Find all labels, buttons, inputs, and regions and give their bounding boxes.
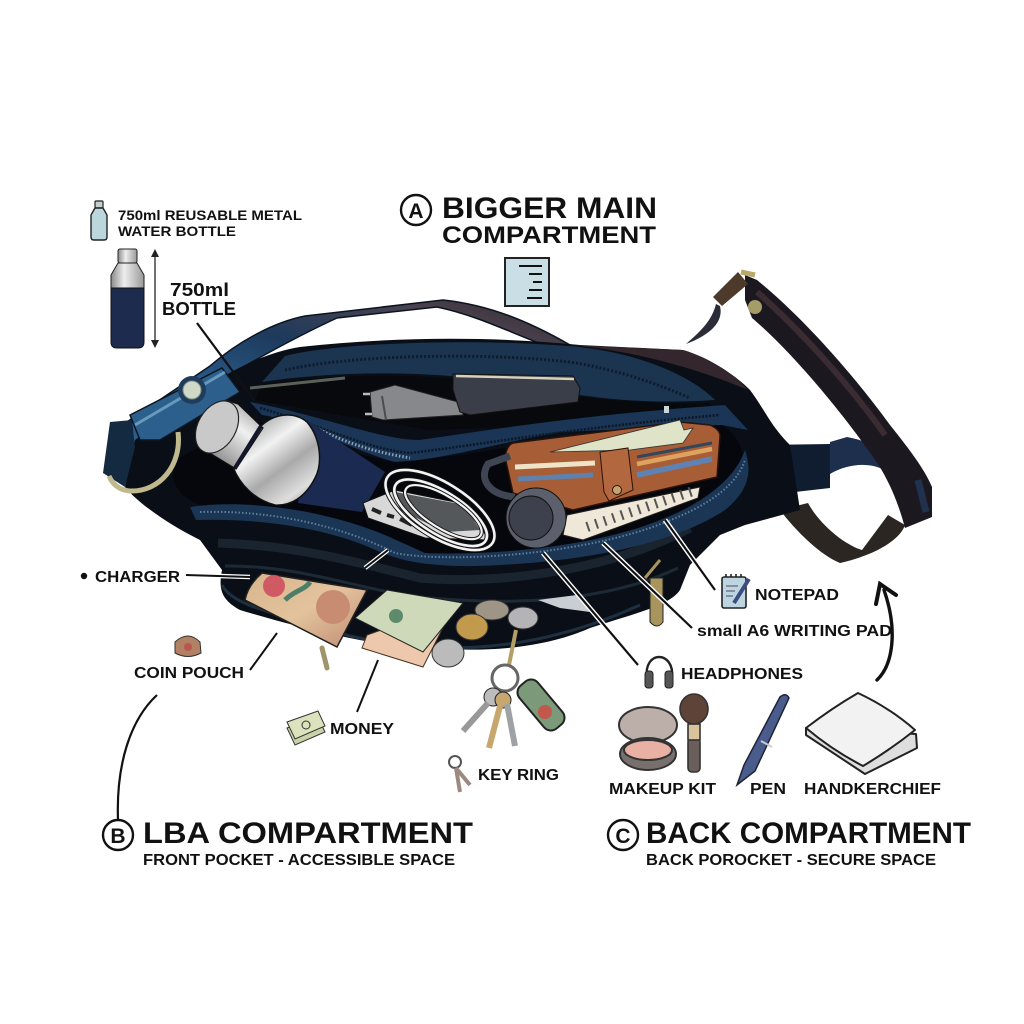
wallet — [505, 420, 720, 510]
phone in back pocket — [453, 374, 580, 415]
icon: notepad — [722, 574, 749, 608]
front edges — [225, 566, 678, 601]
middle zipper band — [250, 402, 748, 462]
heading: A bigger main compartment: BIGGER MAIN — [442, 192, 657, 225]
label: reusable metal water bottle — [118, 207, 302, 239]
label: money: MONEY — [330, 721, 394, 738]
label: reusable metal water bottle: WATER BOTTLE — [118, 223, 236, 239]
label: pen: PEN — [750, 781, 786, 798]
silver phone peek — [538, 595, 590, 612]
bag illustration — [103, 272, 932, 668]
label: small A6 writing pad — [603, 543, 892, 640]
steel bottle in bag — [187, 393, 385, 512]
tab right — [763, 444, 830, 492]
label: 750ml bottle — [162, 280, 236, 319]
shoulder strap right — [686, 272, 932, 563]
heading: A bigger main compartment: COMPARTMENT — [442, 222, 656, 249]
heading: C back compartment: C — [615, 825, 631, 848]
label: coin pouch: COIN POUCH — [134, 665, 244, 682]
heading: A bigger main compartment — [401, 192, 657, 249]
charger pocket marker — [365, 550, 388, 568]
icon: key ring — [449, 756, 470, 792]
icon: pen — [737, 695, 789, 785]
label: makeup kit: MAKEUP KIT — [609, 781, 716, 798]
notebook — [563, 487, 700, 540]
upper blue band — [262, 342, 715, 402]
top handle — [115, 300, 570, 445]
icon: headphones — [645, 657, 673, 688]
icon: makeup brush — [680, 694, 708, 772]
arrow: bottle height — [151, 249, 159, 348]
ring — [109, 432, 178, 491]
label: charger: CHARGER — [95, 569, 180, 586]
heading: C back compartment: BACK POROCKET - SECURE SPACE — [646, 852, 936, 869]
label: headphones — [543, 553, 803, 683]
main body — [125, 339, 800, 650]
heading: B LBA compartment: LBA COMPARTMENT — [143, 817, 473, 850]
label: charger — [81, 569, 250, 586]
back pocket interior — [255, 376, 715, 430]
label: notepad — [665, 520, 839, 604]
strap end with snap — [130, 368, 240, 440]
coin pouch in pocket — [245, 573, 367, 668]
label: handkerchief: HANDKERCHIEF — [804, 781, 941, 798]
heading: B LBA compartment: FRONT POCKET - ACCESSIBLE SPACE — [143, 852, 455, 869]
icon: big bottle — [111, 249, 144, 348]
side zipper pull — [650, 578, 663, 626]
stylus — [250, 378, 345, 388]
money in pocket — [355, 590, 463, 667]
icon: coin pouch — [175, 636, 201, 656]
power bank and cable — [363, 454, 507, 566]
label: money — [330, 660, 394, 738]
label: headphones: HEADPHONES — [681, 666, 803, 683]
coins — [432, 600, 538, 667]
brown leather tint — [570, 345, 748, 390]
icon: measuring document — [505, 258, 549, 306]
arrow: back compartment to main — [876, 584, 896, 680]
label: small A6 writing pad: small A6 WRITING PAD — [697, 623, 892, 640]
headphones in bag — [484, 456, 566, 548]
icon: money — [287, 711, 325, 745]
heading: A bigger main compartment: A — [408, 200, 424, 223]
label: 750ml bottle: 750ml — [170, 280, 229, 300]
icon: handkerchief — [806, 693, 917, 774]
label: coin pouch — [134, 633, 277, 682]
key ring in use — [463, 630, 568, 748]
icon: makeup compact — [619, 707, 677, 770]
main compartment interior — [173, 420, 743, 556]
label: reusable metal water bottle: 750ml REUSABLE METAL — [118, 207, 302, 223]
leader arrow: B to pocket — [118, 695, 157, 820]
heading: C back compartment: BACK COMPARTMENT — [646, 817, 971, 850]
heading: B LBA compartment — [103, 817, 473, 869]
heading: B LBA compartment: B — [110, 825, 126, 848]
left tab — [103, 420, 135, 487]
heading: C back compartment — [608, 817, 971, 869]
icon: water bottle small — [91, 201, 107, 240]
charger in back pocket — [363, 385, 463, 420]
leader line: bottle — [197, 323, 254, 400]
label: key ring: KEY RING — [478, 767, 559, 784]
label: notepad: NOTEPAD — [755, 587, 839, 604]
lower zipper band — [190, 450, 748, 566]
label: 750ml bottle: BOTTLE — [162, 299, 236, 319]
